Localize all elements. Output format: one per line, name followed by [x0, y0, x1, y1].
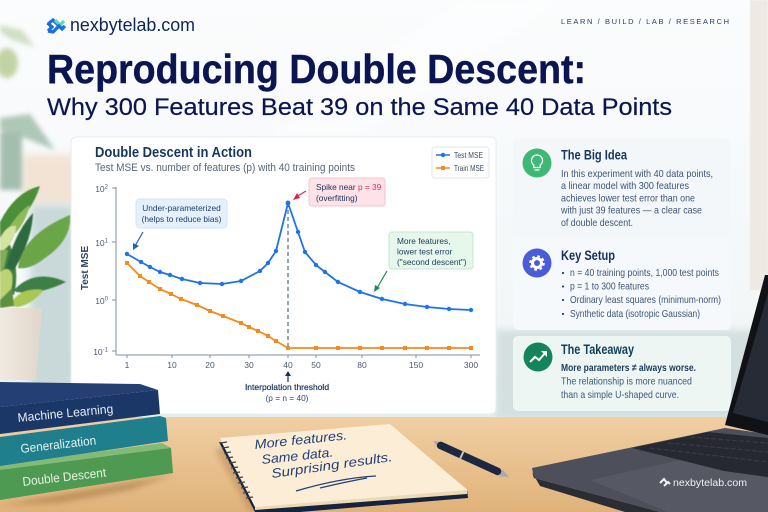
x axis: 1	[125, 360, 130, 370]
callout: second descent: lower test error	[397, 246, 453, 256]
x axis: 80	[357, 360, 367, 370]
pen	[431, 438, 511, 480]
arrow: under-parameterized	[133, 232, 143, 250]
top navigation: LEARN / BUILD / LAB / RESEARCH	[561, 17, 729, 26]
takeaway text: The relationship is more nuanced	[561, 376, 692, 388]
logo wordmark: nexbytelab.com	[70, 15, 195, 35]
laptop	[532, 275, 768, 512]
y axis: 10	[95, 296, 105, 306]
icon: gear	[522, 248, 552, 278]
logo	[48, 15, 195, 35]
threshold label: (p = n = 40)	[266, 393, 309, 403]
callout: under-parameterized	[136, 199, 227, 228]
callout: second descent	[389, 232, 473, 269]
arrow: threshold	[285, 371, 291, 382]
legend	[432, 147, 489, 178]
book: machine learning: Machine Learning	[17, 402, 114, 425]
key setup list: n = 40 training points, 1,000 test points	[570, 268, 719, 279]
key setup list	[562, 268, 721, 320]
big idea text	[560, 169, 713, 229]
plant pot	[0, 308, 42, 380]
icon: logo mark	[48, 20, 65, 32]
handwritten note: More features.	[254, 427, 348, 452]
x axis	[116, 355, 480, 370]
handwritten note	[254, 427, 393, 481]
big idea text: a linear model with 300 features	[561, 181, 689, 192]
laptop logo: nexbytelab.com	[673, 477, 747, 489]
wooden desk	[0, 417, 768, 512]
callout: spike: Spike near p = 39	[316, 182, 382, 192]
threshold dashed line	[287, 203, 289, 348]
threshold label: Interpolation threshold	[245, 382, 329, 392]
spiral binding	[220, 442, 253, 498]
arrow: spike	[293, 191, 306, 200]
handwritten note: Same data.	[261, 445, 334, 467]
big idea text: of double descent.	[561, 218, 633, 229]
y axis: 0	[105, 296, 109, 302]
keyboard	[632, 432, 768, 477]
chart subtitle: Test MSE vs. number of features (p) with 40 training points	[95, 162, 356, 174]
y axis: 1	[105, 238, 109, 244]
handwritten note: Surprising results.	[270, 449, 393, 481]
book: generalization: Generalization	[20, 433, 97, 456]
book: double descent: Double Descent	[22, 466, 107, 489]
panel: chart	[71, 137, 496, 414]
y axis	[80, 184, 116, 357]
arrow: second descent	[374, 271, 387, 292]
books stack	[0, 382, 175, 505]
icon: laptop logo mark	[660, 479, 670, 486]
key setup list: Synthetic data (isotropic Gaussian)	[570, 309, 700, 320]
x axis: 150	[409, 360, 423, 370]
chart title: Double Descent in Action	[95, 145, 252, 161]
y axis: Test MSE	[80, 246, 91, 290]
key setup list: p = 1 to 300 features	[570, 282, 649, 292]
x axis: 30	[244, 360, 254, 370]
big idea text: with just 39 features — a clear case	[560, 206, 702, 216]
legend: Test MSE	[454, 151, 483, 160]
big idea text: achieves lower test error than one	[561, 194, 695, 204]
legend: Train MSE	[454, 164, 484, 173]
takeaway text	[561, 363, 696, 401]
callout: spike	[309, 178, 385, 206]
takeaway text: More parameters ≠ always worse.	[561, 363, 696, 374]
book: double descent	[0, 443, 173, 500]
notebook	[215, 424, 468, 512]
threshold label	[245, 382, 329, 403]
big idea text: In this experiment with 40 data points,	[561, 169, 713, 180]
screen	[725, 275, 768, 435]
takeaway heading: The Takeaway	[561, 342, 634, 357]
key setup list: Ordinary least squares (minimum-norm)	[570, 295, 721, 306]
train MSE series	[125, 261, 473, 350]
plant	[0, 186, 70, 380]
callout: spike: (overfitting)	[316, 193, 358, 203]
callout: under-parameterized: (helps to reduce bias)	[142, 214, 222, 224]
icon: trend arrow	[524, 342, 552, 372]
x axis: 20	[205, 360, 215, 370]
callout: second descent: More features,	[397, 236, 450, 246]
big idea heading: The Big Idea	[561, 148, 627, 162]
underline strokes	[296, 476, 376, 491]
y axis: 10	[93, 347, 103, 357]
y axis: 10	[95, 184, 105, 194]
book: machine learning	[0, 382, 160, 434]
takeaway text: than a simple U-shaped curve.	[561, 390, 679, 401]
icon: light bulb	[522, 148, 552, 178]
background: blurred plant	[0, 25, 55, 190]
subtitle: Why 300 Features Beat 39 on the Same 40 Data Points	[47, 94, 672, 121]
y axis: 10	[95, 238, 105, 248]
x axis: 50	[311, 360, 321, 370]
y axis: 2	[105, 184, 109, 190]
callout: under-parameterized: Under-parameterized	[142, 203, 221, 213]
y axis: -1	[103, 348, 109, 354]
book: generalization	[0, 416, 168, 466]
title: Reproducing Double Descent:	[47, 46, 586, 92]
x axis: 10	[167, 360, 177, 370]
callout: second descent: ("second descent")	[397, 257, 467, 267]
plant leaves	[0, 186, 70, 308]
panel: key setup	[513, 241, 731, 330]
key setup heading: Key Setup	[561, 248, 615, 263]
panel: the takeaway	[513, 336, 731, 411]
x axis: 300	[464, 360, 478, 370]
test MSE series	[125, 201, 473, 312]
panel: the big idea	[513, 139, 731, 236]
x axis: 40	[283, 360, 293, 370]
